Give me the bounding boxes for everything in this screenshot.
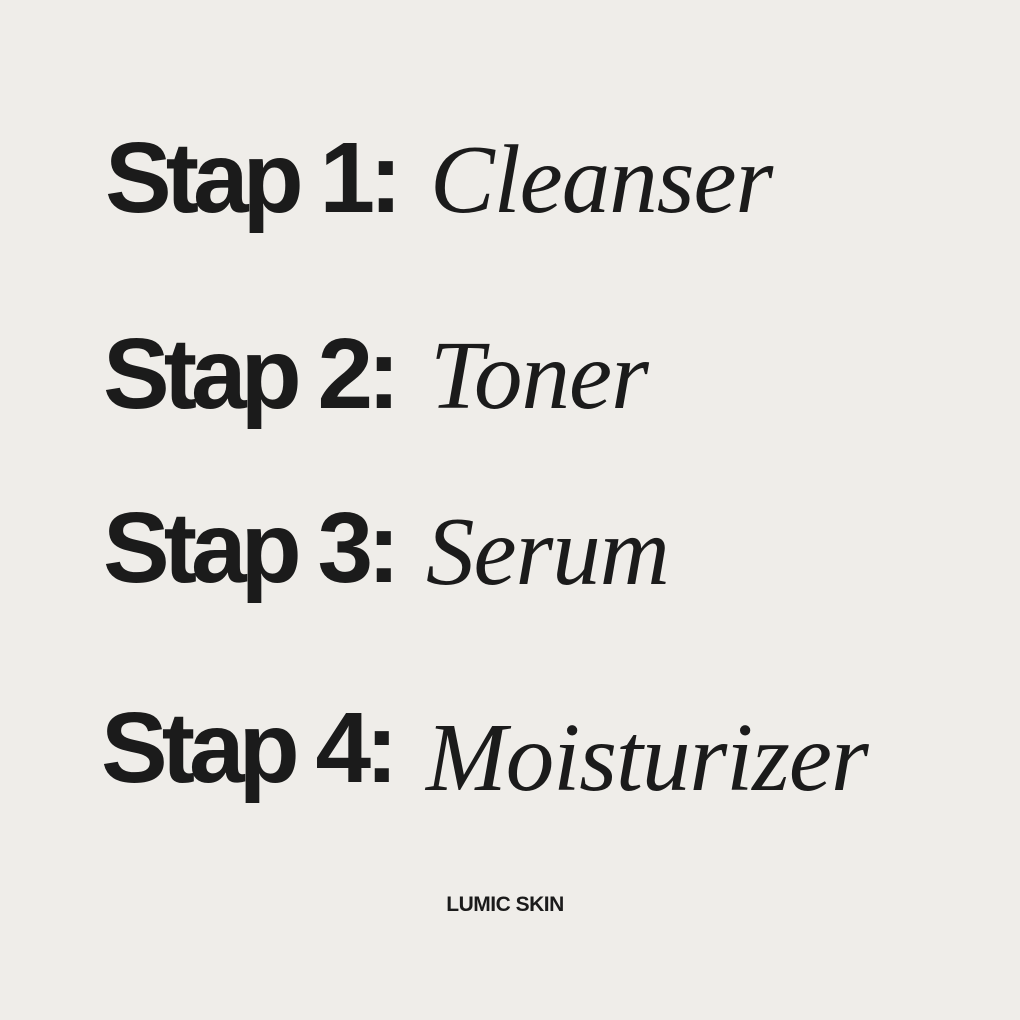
step 4 row [101, 692, 870, 811]
step 2 row: Toner [430, 322, 650, 429]
step 3 row: Stap 3: [103, 492, 394, 604]
step 4 row: Moisturizer [424, 704, 870, 811]
step 3 row: Serum [426, 498, 669, 605]
step 2 row [103, 318, 650, 430]
step 1 row [105, 122, 775, 234]
step 1 row: Stap 1: [105, 122, 396, 234]
step 2 row: Stap 2: [103, 318, 394, 430]
brand footer: LUMIC SKIN [446, 893, 564, 916]
step 1 row: Cleanser [430, 126, 775, 233]
step 4 row: Stap 4: [101, 692, 392, 804]
step 3 row [103, 492, 669, 605]
